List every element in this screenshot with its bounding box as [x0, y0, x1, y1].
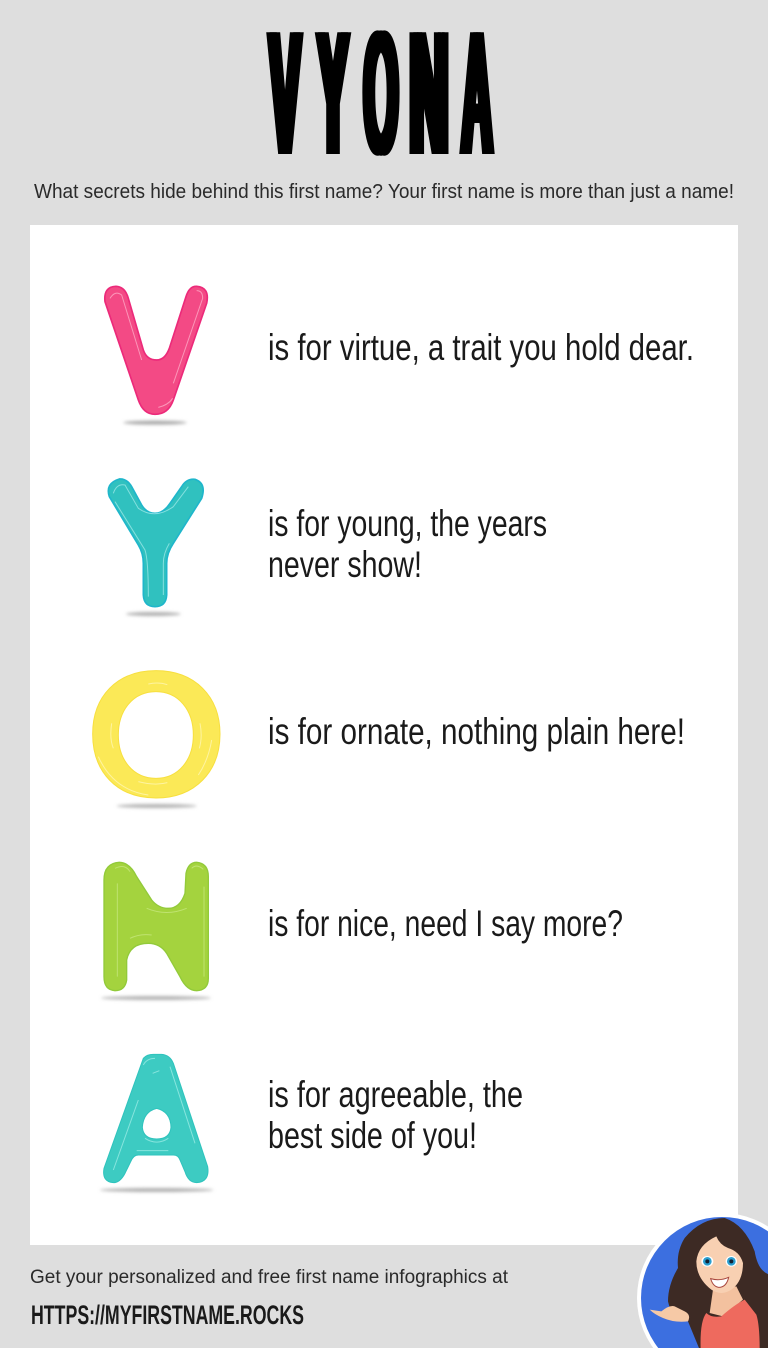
subtitle: What secrets hide behind this first name? Your first name is more than just a name!	[34, 181, 734, 203]
avatar mouth	[711, 1277, 729, 1287]
avatar face	[696, 1236, 743, 1293]
text: Y line: is for young, the years	[268, 503, 547, 544]
icon: letter V	[105, 286, 207, 425]
avatar shirt	[701, 1300, 760, 1348]
text: Y line: never show!	[268, 544, 422, 585]
icon: letter N	[101, 862, 211, 1000]
panel: letters card	[30, 225, 738, 1245]
icon: letter Y	[108, 479, 203, 616]
avatar hair	[668, 1218, 768, 1348]
avatar neck	[710, 1286, 743, 1316]
text: A line: is for agreeable, the	[268, 1074, 523, 1115]
icon: letter A	[100, 1054, 213, 1192]
footer url: HTTPS://MYFIRSTNAME.ROCKS	[31, 1300, 304, 1330]
text: A line	[268, 1074, 523, 1156]
text: A line: best side of you!	[268, 1115, 477, 1156]
avatar eyes	[701, 1256, 737, 1267]
text: N line: is for nice, need I say more?	[268, 903, 623, 944]
text: Y line	[268, 503, 547, 585]
title	[266, 0, 495, 192]
avatar	[637, 1213, 768, 1348]
icon: letter O	[93, 671, 220, 808]
footer text: Get your personalized and free first name infographics at	[30, 1267, 509, 1288]
avatar hand	[650, 1306, 689, 1322]
